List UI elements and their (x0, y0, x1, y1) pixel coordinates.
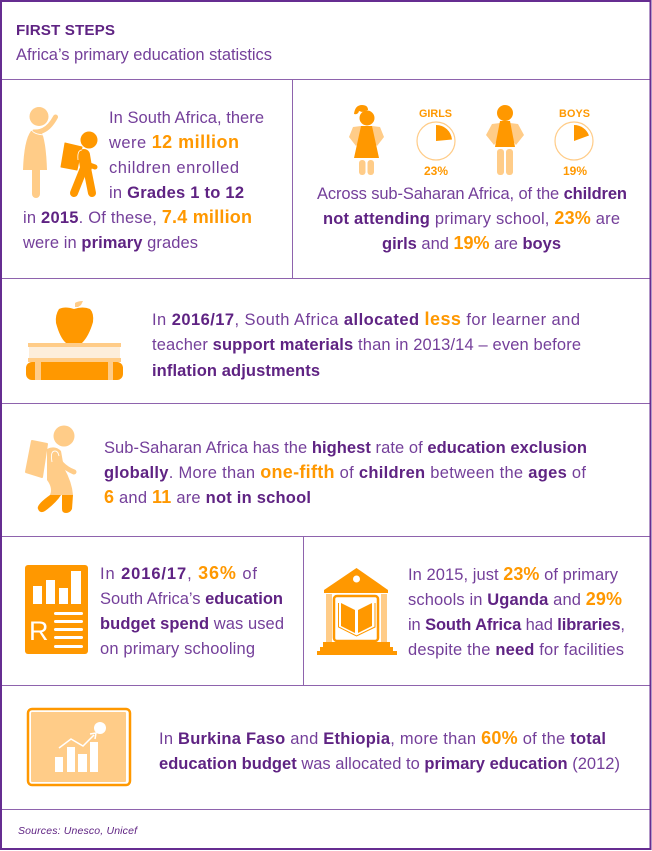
text block: globally. More than one-fifth of children between the ages of (104, 462, 586, 482)
icon: apple on books (26, 301, 123, 380)
text block: not attending primary school, 23% are (323, 208, 620, 228)
chart: girls pie (417, 108, 455, 178)
icon: growth chart (28, 709, 130, 785)
chart: boys pie: BOYS (559, 108, 590, 120)
text block: South Africa’s education (100, 590, 283, 608)
text block: were in primary grades (22, 234, 198, 252)
text block: teacher support materials than in 2013/14 – even before (152, 336, 581, 354)
chart: girls pie: 23% (424, 164, 448, 178)
chart: girls pie: GIRLS (419, 108, 452, 120)
icon: budget report (25, 565, 88, 654)
text block: budget spend was used (100, 615, 284, 633)
sources: Sources: Unesco, Unicef (18, 825, 138, 837)
text block: in Grades 1 to 12 (109, 184, 244, 202)
text block (22, 109, 264, 252)
text block: In 2016/17, South Africa allocated less for learner and (152, 309, 580, 329)
text block (408, 564, 625, 659)
text block: children enrolled (109, 159, 239, 177)
text block: schools in Uganda and 29% (408, 589, 622, 609)
panel: Burkina Faso and Ethiopia (2, 686, 650, 809)
text block: in 2015. Of these, 7.4 million (23, 207, 252, 227)
chart: boys pie (555, 108, 593, 178)
panel: school libraries (304, 537, 650, 685)
text block: inflation adjustments (152, 362, 320, 380)
panel: support materials (2, 279, 650, 403)
chart: boys pie: 19% (563, 164, 587, 178)
text block (104, 439, 587, 507)
text block: Across sub-Saharan Africa, of the children (317, 185, 627, 203)
text block: In Burkina Faso and Ethiopia, more than 60% of the total (159, 728, 606, 748)
text block: Sub-Saharan Africa has the highest rate of education exclusion (104, 439, 587, 457)
panel: girls and boys out of school (293, 80, 650, 278)
icon: boy (486, 105, 524, 175)
text block: education budget was allocated to primary education (2012) (159, 755, 620, 773)
text block: were 12 million (108, 132, 239, 152)
panel: header (2, 2, 650, 79)
text block: in South Africa had libraries, (408, 616, 625, 634)
title: FIRST STEPS (16, 22, 115, 39)
text block: In 2015, just 23% of primary (408, 564, 619, 584)
icon: girl (349, 105, 384, 175)
text block: girls and 19% are boys (382, 233, 561, 253)
text block: In 2016/17, 36% of (100, 563, 257, 583)
text block (317, 185, 627, 253)
text block: on primary schooling (100, 640, 255, 658)
icon: child with backpack (26, 426, 74, 513)
text block (159, 728, 620, 773)
text block: 6 and 11 are not in school (104, 487, 311, 507)
icon: budget report: R (29, 616, 48, 646)
text block (152, 309, 581, 380)
panel: education exclusion (2, 404, 650, 536)
panel: South Africa enrolment (2, 80, 292, 278)
text block (100, 563, 284, 658)
subtitle: Africa’s primary education statistics (16, 46, 272, 64)
text block: despite the need for facilities (408, 641, 624, 659)
text block: In South Africa, there (109, 109, 264, 127)
panel: education budget (2, 537, 303, 685)
icon: adult and child with backpack (23, 107, 98, 198)
icon: library building (317, 568, 397, 655)
